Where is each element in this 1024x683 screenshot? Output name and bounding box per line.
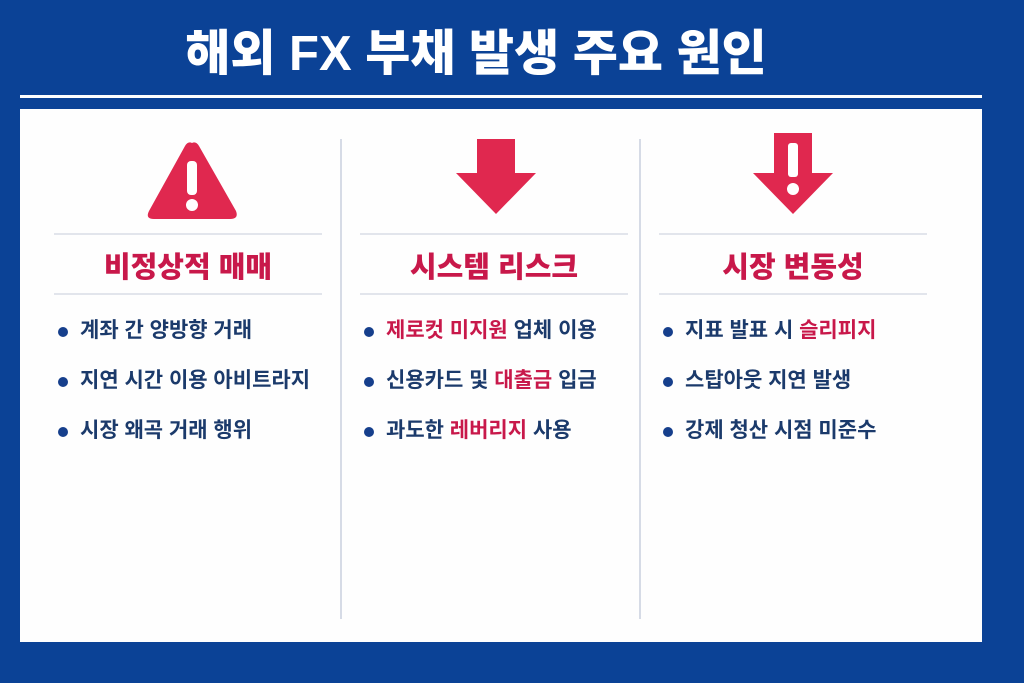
panel: main — [20, 109, 982, 642]
column: 시스템 리스크 — [360, 139, 628, 442]
column: 시장 변동성 — [659, 133, 927, 442]
bullet list: 신용카드 및 대출금 입금 — [386, 369, 597, 392]
icon: down arrow with exclamation — [753, 133, 833, 214]
bullet list: 과도한 레버리지 사용 — [386, 419, 572, 442]
bullet list — [663, 319, 876, 442]
title: 해외 FX 부채 발생 주요 원인 — [185, 27, 767, 81]
icon: down arrow — [456, 139, 536, 214]
heading: 비정상적 매매 — [104, 252, 272, 284]
bullet list: 시장 왜곡 거래 행위 — [80, 419, 252, 442]
bullet list: 계좌 간 양방향 거래 — [80, 319, 252, 342]
icon: warning triangle — [148, 142, 237, 219]
bullet list: 지연 시간 이용 아비트라지 — [80, 369, 310, 392]
bullet list: 제로컷 미지원 업체 이용 — [386, 319, 597, 342]
bullet list — [364, 319, 597, 442]
bullet list: 스탑아웃 지연 발생 — [685, 369, 851, 392]
column: 비정상적 매매 — [54, 142, 322, 442]
heading: 시장 변동성 — [722, 252, 864, 284]
bullet list — [58, 319, 310, 442]
heading: 시스템 리스크 — [410, 252, 578, 284]
bullet list: 지표 발표 시 슬리피지 — [685, 319, 876, 342]
bullet list: 강제 청산 시점 미준수 — [685, 419, 876, 442]
